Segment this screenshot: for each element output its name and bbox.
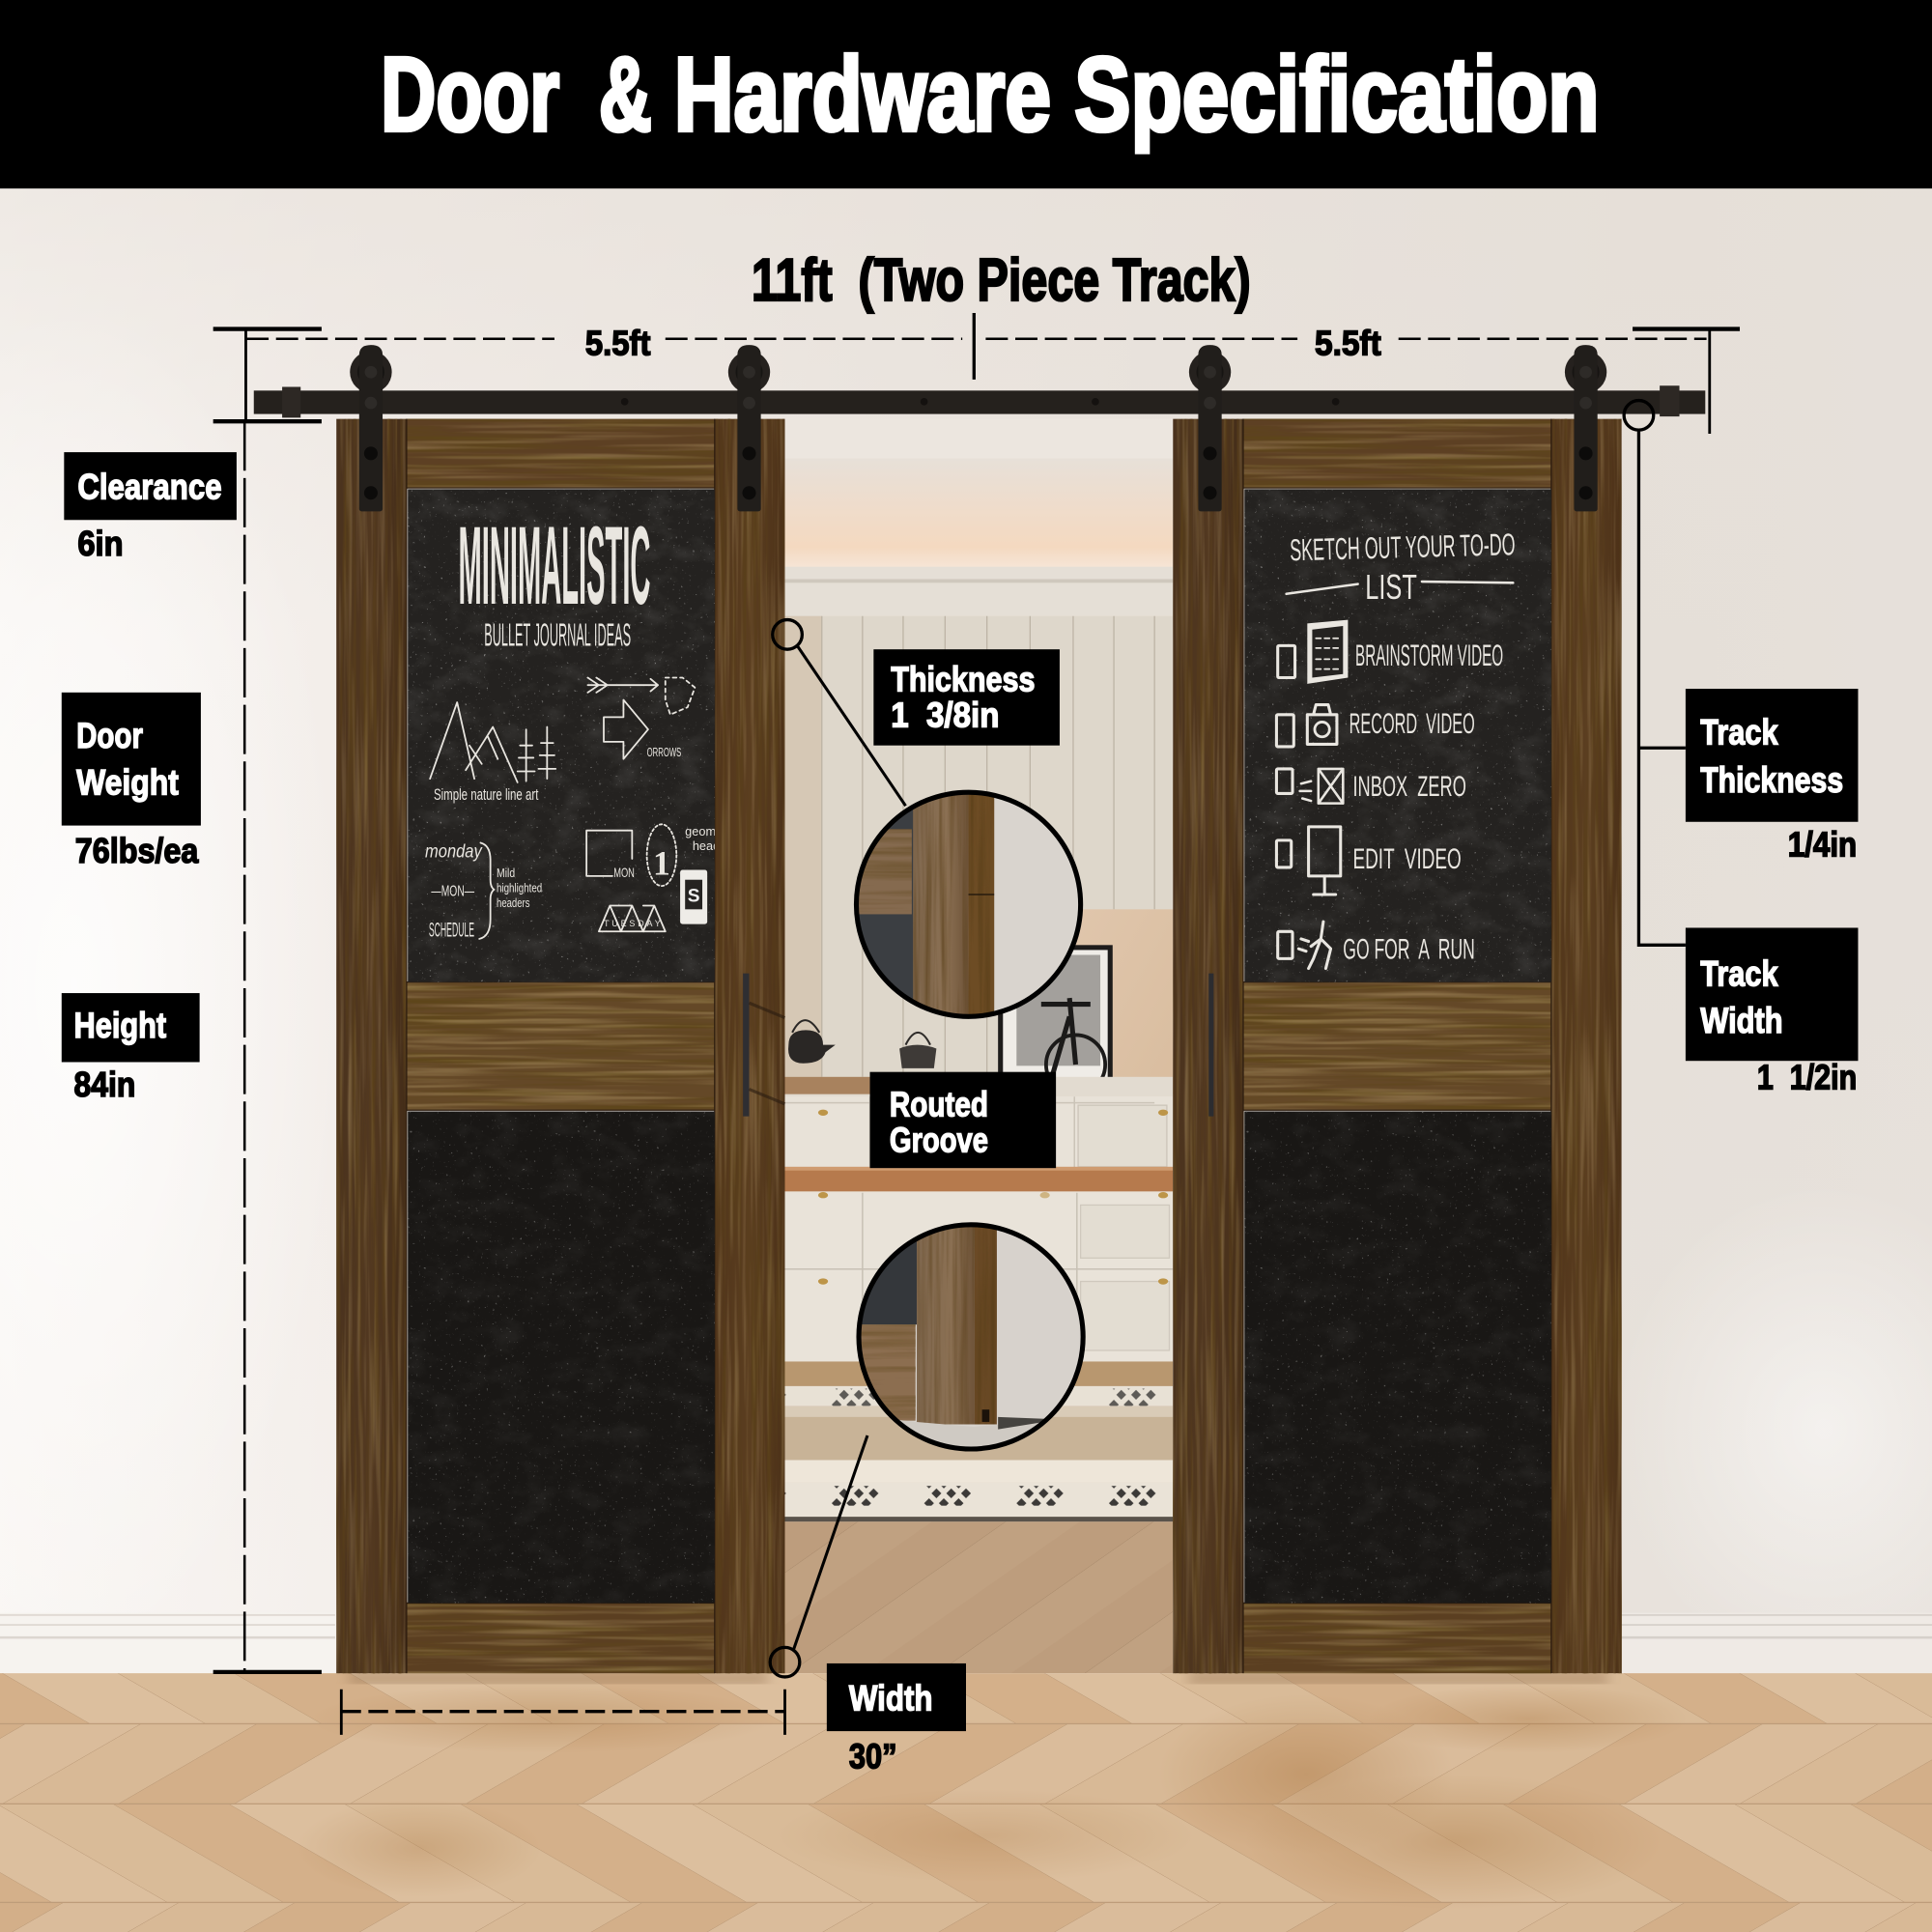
callout: width: [827, 1663, 966, 1776]
callout: clearance: Clearance: [77, 468, 222, 507]
callout: thickness: Thickness: [891, 661, 1035, 699]
chalk art: minimalistic bullet journal: headers: [497, 895, 529, 910]
chalk art: to-do list: BRAINSTORM VIDEO: [1355, 638, 1503, 672]
chalk art: to-do list: RECORD VIDEO: [1350, 708, 1475, 740]
chalk art: minimalistic bullet journal: head: [693, 838, 720, 853]
callout: routed groove: [870, 1072, 1056, 1168]
callout: thickness: [873, 649, 1060, 746]
chalk art: minimalistic bullet journal: 1: [653, 844, 670, 883]
callout: clearance: 6in: [77, 525, 124, 563]
door pull handle left: [743, 974, 784, 1117]
framed bicycle photo: [998, 945, 1113, 1077]
callout leader lines and markers: [770, 401, 1686, 1677]
title banner: &: [599, 36, 652, 153]
callout: door weight: Weight: [76, 763, 179, 803]
callout: width: 30”: [849, 1737, 897, 1776]
chalk art: to-do list: INBOX ZERO: [1353, 771, 1466, 803]
chalk art: to-do list: SKETCH OUT YOUR TO-DO: [1290, 526, 1516, 567]
height dimension line: [213, 421, 322, 1672]
callout: width: Width: [849, 1678, 933, 1718]
callout: routed groove: Routed: [890, 1086, 988, 1124]
door pull handle right: [1208, 974, 1213, 1117]
callout: routed groove: Groove: [890, 1122, 988, 1160]
width dimension line: [341, 1690, 784, 1735]
track dimension lines: [213, 313, 1740, 434]
chalk art: minimalistic bullet journal: TUESDAY: [604, 919, 661, 928]
right barn door: [1173, 419, 1622, 1673]
chalk art: minimalistic bullet journal: SCHEDULE: [429, 917, 474, 941]
callout: door weight: [62, 693, 201, 870]
interior room seen between the doors: [784, 419, 1175, 1673]
left segment label: 5.5ft: [585, 324, 651, 362]
callout: door weight: 76lbs/ea: [75, 832, 199, 870]
chalk art: minimalistic bullet journal: geome: [685, 824, 723, 838]
callout: height: 84in: [74, 1065, 135, 1104]
callout: track thickness: Track: [1700, 712, 1778, 752]
left barn door: [336, 419, 784, 1673]
rug and floor in the room: [784, 1361, 1173, 1673]
chalk art: to-do list: EDIT VIDEO: [1353, 843, 1462, 875]
wall panelling: [784, 616, 1173, 1090]
callout: door weight: Door: [76, 716, 143, 755]
chalk art: minimalistic bullet journal: BULLET JOURNAL IDEAS: [484, 617, 631, 653]
chalk art: to-do list: LIST: [1365, 568, 1417, 607]
callout: track width: 1 1/2in: [1757, 1059, 1857, 1097]
chalk art: minimalistic bullet journal: MON: [613, 865, 635, 880]
callout: track width: Track: [1700, 953, 1778, 993]
callout: height: Height: [74, 1006, 166, 1045]
chalk art: minimalistic bullet journal: [425, 504, 723, 941]
callout: thickness: 1 3/8in: [891, 696, 999, 735]
callout: track thickness: Thickness: [1700, 760, 1843, 800]
title banner: Specification: [1074, 36, 1600, 153]
hanger straps: [350, 345, 1606, 511]
callout: track thickness: [1686, 689, 1858, 864]
kitchen counter and cabinets: [784, 1077, 1173, 1361]
lens: door edge top detail: [850, 788, 1096, 1023]
title banner: Door: [381, 36, 559, 153]
callout: clearance: [64, 452, 237, 563]
chalk art: to-do list: [1276, 526, 1516, 969]
teapots: [788, 1020, 936, 1068]
chalk art: minimalistic bullet journal: Mild: [497, 866, 515, 880]
wood chevron floor: [0, 1673, 1932, 1932]
chalk art: minimalistic bullet journal: monday: [425, 842, 483, 863]
title banner: Hardware: [674, 36, 1051, 153]
chalk art: minimalistic bullet journal: highlighted: [497, 880, 542, 895]
callout: track width: Width: [1700, 1001, 1783, 1040]
chalk art: minimalistic bullet journal: Simple nature line art: [434, 785, 539, 804]
text: MINIMALISTIC: [458, 504, 650, 628]
chalk art: minimalistic bullet journal: ORROWS: [647, 745, 681, 759]
lens: routed groove bottom detail: [850, 1220, 1096, 1454]
barn door track rail: [254, 385, 1705, 417]
callout: track thickness: 1/4in: [1788, 825, 1857, 864]
callout: track width: [1686, 927, 1858, 1097]
title banner: [0, 0, 1932, 188]
chalk art: minimalistic bullet journal: —MON—: [431, 883, 475, 899]
chalk art: to-do list: GO FOR A RUN: [1343, 933, 1475, 965]
track length heading: 11ft (Two Piece Track): [752, 246, 1251, 314]
callout: height: [62, 993, 200, 1104]
chalk art: minimalistic bullet journal: S: [688, 887, 700, 907]
right segment label: 5.5ft: [1315, 324, 1381, 362]
